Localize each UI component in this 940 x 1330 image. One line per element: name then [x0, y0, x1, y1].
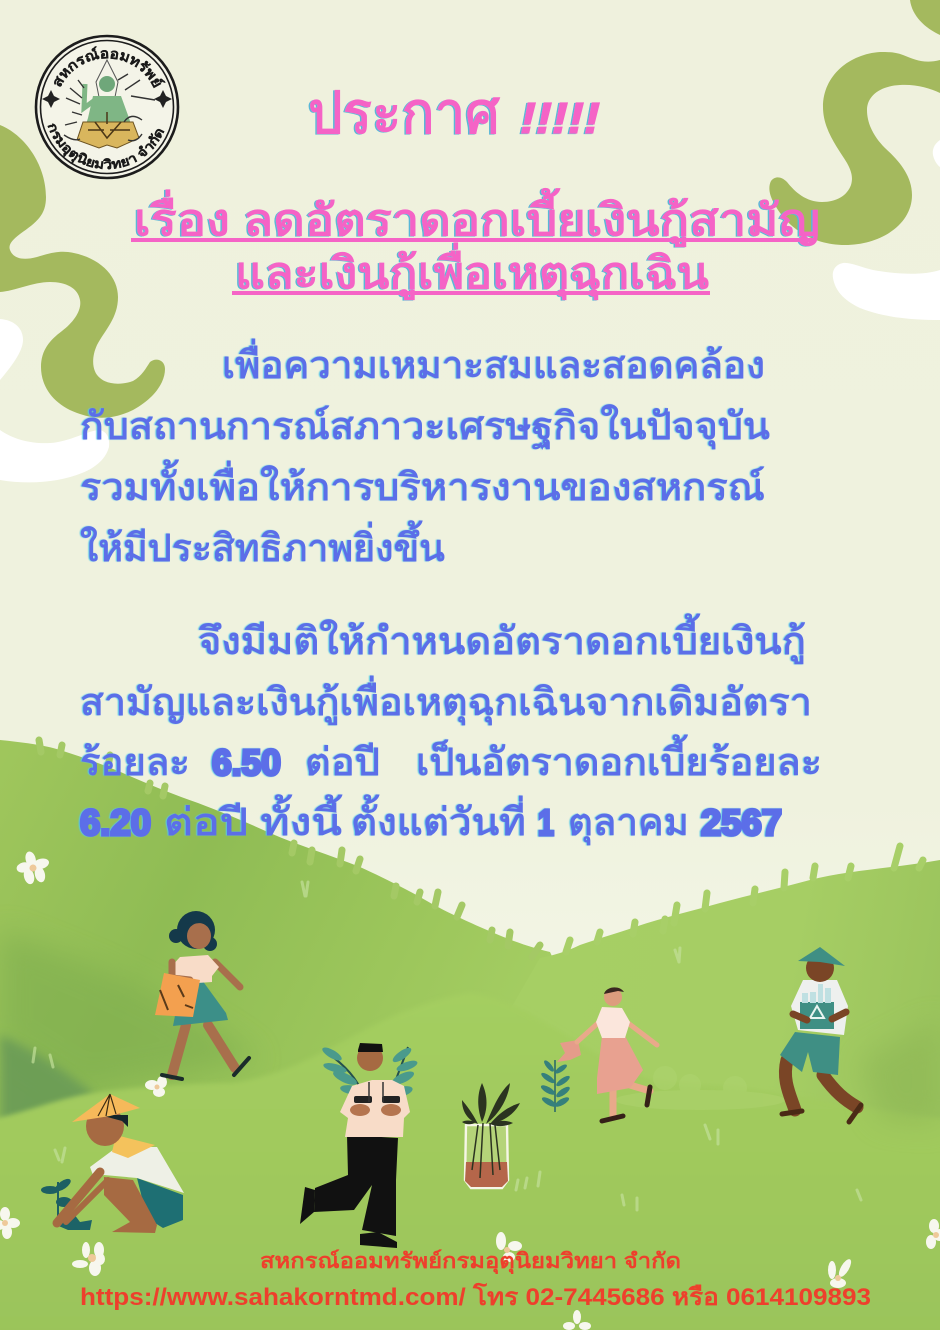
person: crouching man with hat — [38, 1094, 184, 1233]
paragraph 2: ร้อยละ — [80, 742, 190, 784]
footer — [80, 1249, 871, 1311]
paragraph 2: จึงมีมติให้กำหนดอัตราดอกเบี้ยเงินกู้ — [198, 613, 806, 664]
paragraph 2: ตุลาคม — [568, 802, 689, 845]
grass tufts on hill edge — [39, 740, 923, 957]
subject heading: เรื่อง ลดอัตราดอกเบี้ยเงินกู้สามัญ — [134, 188, 820, 247]
paragraph 2: 2567 — [701, 802, 782, 843]
flower — [828, 1257, 853, 1288]
dark band on left hill — [0, 930, 260, 1090]
title — [308, 81, 600, 146]
flower — [145, 1076, 167, 1097]
paragraph 2: 1 — [538, 802, 554, 843]
footer: สหกรณ์ออมทรัพย์กรมอุตุนิยมวิทยา จำกัด — [260, 1249, 681, 1275]
person: woman with orange bag — [155, 911, 249, 1079]
seal top text: สหกรณ์ออมทรัพย์ — [54, 46, 166, 88]
paragraph 2: 6.50 — [212, 742, 281, 783]
flower — [0, 1207, 20, 1239]
person: woman with watering can — [540, 987, 657, 1121]
flower — [563, 1310, 591, 1330]
flower — [496, 1232, 522, 1262]
paragraph 2: ตั้งแต่วันที่ — [351, 794, 526, 844]
decorative white blobs — [0, 140, 940, 482]
logo seal — [34, 34, 180, 180]
paragraph 2: 6.20 — [80, 802, 151, 843]
right hill — [400, 860, 940, 1200]
flower — [13, 847, 54, 888]
flowers — [0, 847, 940, 1330]
grass blades — [33, 882, 861, 1210]
seal side stars — [42, 90, 172, 108]
paragraph 1: รวมทั้งเพื่อให้การบริหารงานของสหกรณ์ — [80, 459, 765, 509]
paragraph 2: เป็นอัตราดอกเบี้ยร้อยละ — [416, 734, 822, 784]
title: ประกาศ — [308, 81, 500, 146]
paragraph 1 — [80, 339, 770, 570]
foreground hill — [0, 993, 940, 1330]
paragraph 2: สามัญและเงินกู้เพื่อเหตุฉุกเฉินจากเดิมอัตรา — [80, 676, 812, 725]
hills — [0, 740, 940, 1330]
paragraph 2 — [80, 613, 822, 845]
person: man holding potted plants — [300, 1043, 419, 1248]
exclamation marks: !!!!! — [520, 94, 600, 143]
decorative green blob left — [0, 125, 165, 418]
darker shade at right — [860, 1020, 940, 1125]
paragraph 2: ต่อปี — [305, 742, 380, 784]
plant in glass jar — [462, 1083, 520, 1188]
paragraph 2: ต่อปี ทั้งนี้ — [164, 794, 343, 844]
flower — [72, 1242, 105, 1276]
dark patch on left hill — [0, 1035, 95, 1130]
seal bottom text: กรมอุตุนิยมวิทยา จำกัด — [48, 124, 164, 170]
flower — [926, 1219, 940, 1249]
person: man with recycling box — [780, 947, 861, 1122]
left hill — [0, 740, 620, 1200]
paragraph 1: กับสถานการณ์สภาวะเศรษฐกิจในปัจจุบัน — [80, 405, 770, 449]
paragraph 1: เพื่อความเหมาะสมและสอดคล้อง — [222, 339, 765, 387]
footer: https://www.sahakorntmd.com/ โทร 02-7445686 หรือ 0614109893 — [80, 1282, 871, 1311]
decorative green blob right — [769, 0, 940, 245]
deity figure — [64, 60, 155, 148]
paragraph 1: ให้มีประสิทธิภาพยิ่งขึ้น — [80, 520, 445, 570]
lighter bushes — [615, 1066, 785, 1110]
subject heading: และเงินกู้เพื่อเหตุฉุกเฉิน — [235, 242, 709, 300]
subject heading — [131, 188, 820, 300]
